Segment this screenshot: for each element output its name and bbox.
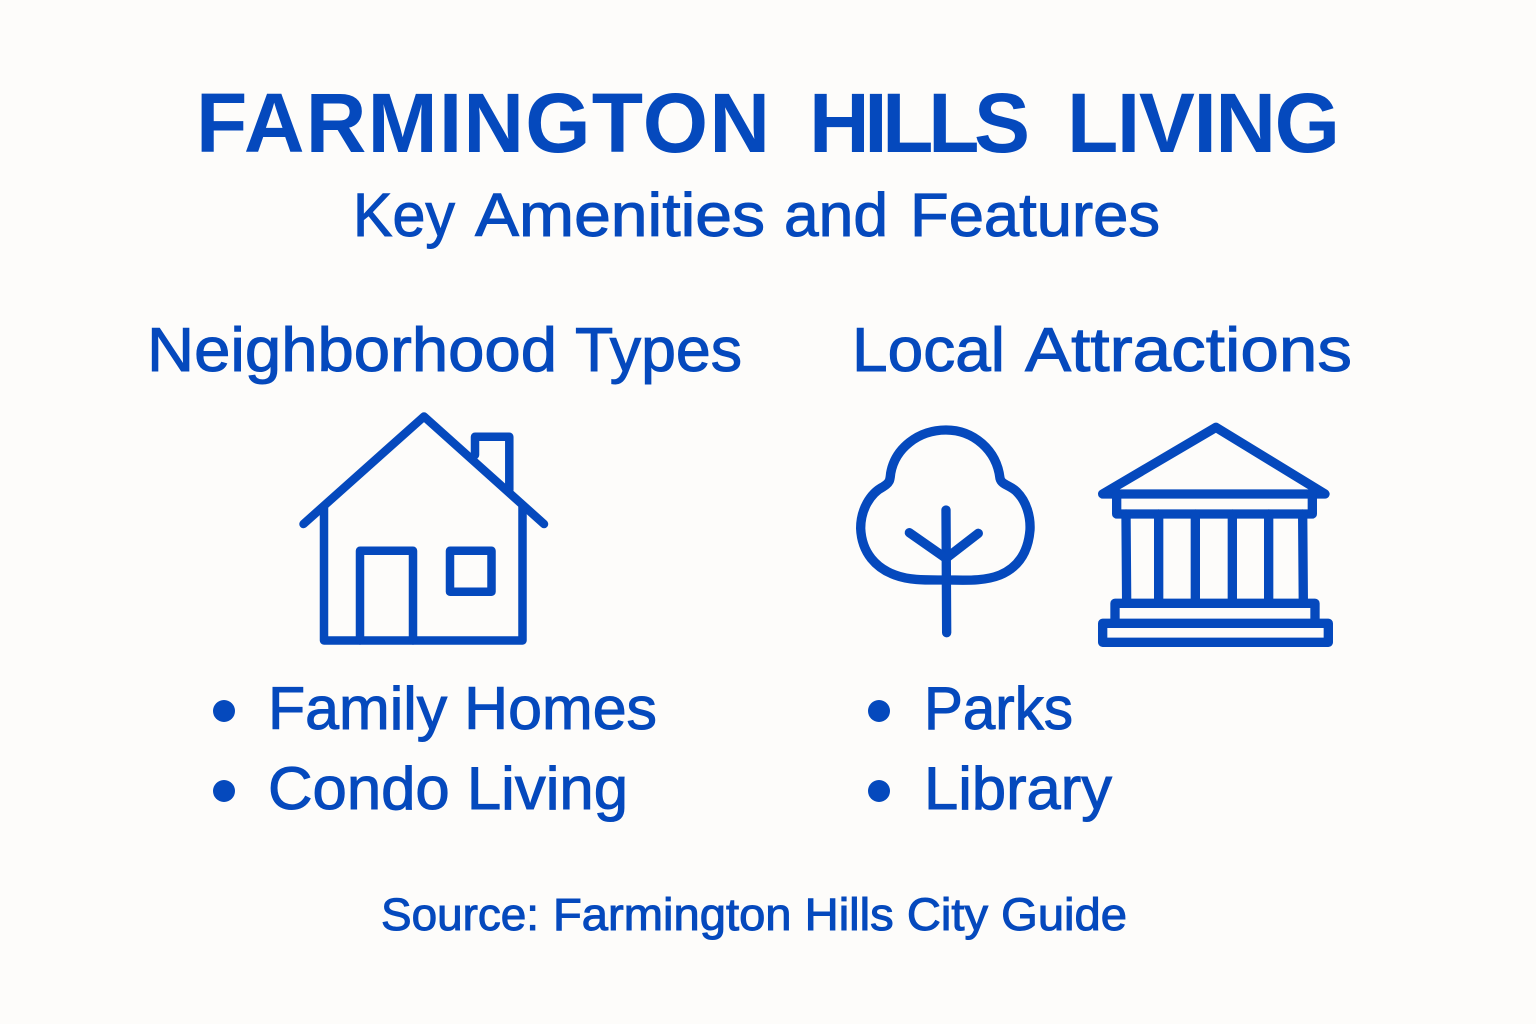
panel: local attractions	[852, 316, 1352, 822]
source note: Farmington Hills City Guide	[553, 889, 1127, 940]
bullet list: neighborhood types	[213, 675, 657, 822]
heading: neighborhood types: Neighborhood	[147, 316, 557, 385]
heading: neighborhood types: Types	[575, 316, 742, 385]
heading: local attractions: Local	[852, 316, 1005, 385]
icon: house	[304, 416, 544, 640]
heading: local attractions: Attractions	[1025, 316, 1352, 385]
title: FARMINGTON	[196, 76, 770, 170]
bullet: library: Library	[924, 755, 1112, 822]
heading: neighborhood types	[147, 316, 742, 385]
icon: tree	[861, 430, 1030, 633]
subtitle: Amenities	[475, 181, 765, 249]
subtitle: Key	[353, 181, 455, 249]
subtitle: Features	[910, 181, 1160, 249]
icon: library building	[1103, 427, 1328, 642]
heading: local attractions	[852, 316, 1352, 385]
bullet: family homes: Family Homes	[268, 675, 657, 742]
bullet: condo living: Condo Living	[268, 755, 628, 822]
bullet list: local attractions	[868, 675, 1112, 822]
title: LIVING	[1067, 76, 1340, 170]
panel: neighborhood types	[147, 316, 742, 822]
source note: Source:	[381, 889, 539, 940]
bullet: parks: Parks	[924, 675, 1073, 742]
subtitle: and	[784, 181, 888, 249]
subtitle	[353, 181, 1160, 249]
title: HILLS	[809, 76, 1030, 170]
title	[196, 76, 1340, 170]
